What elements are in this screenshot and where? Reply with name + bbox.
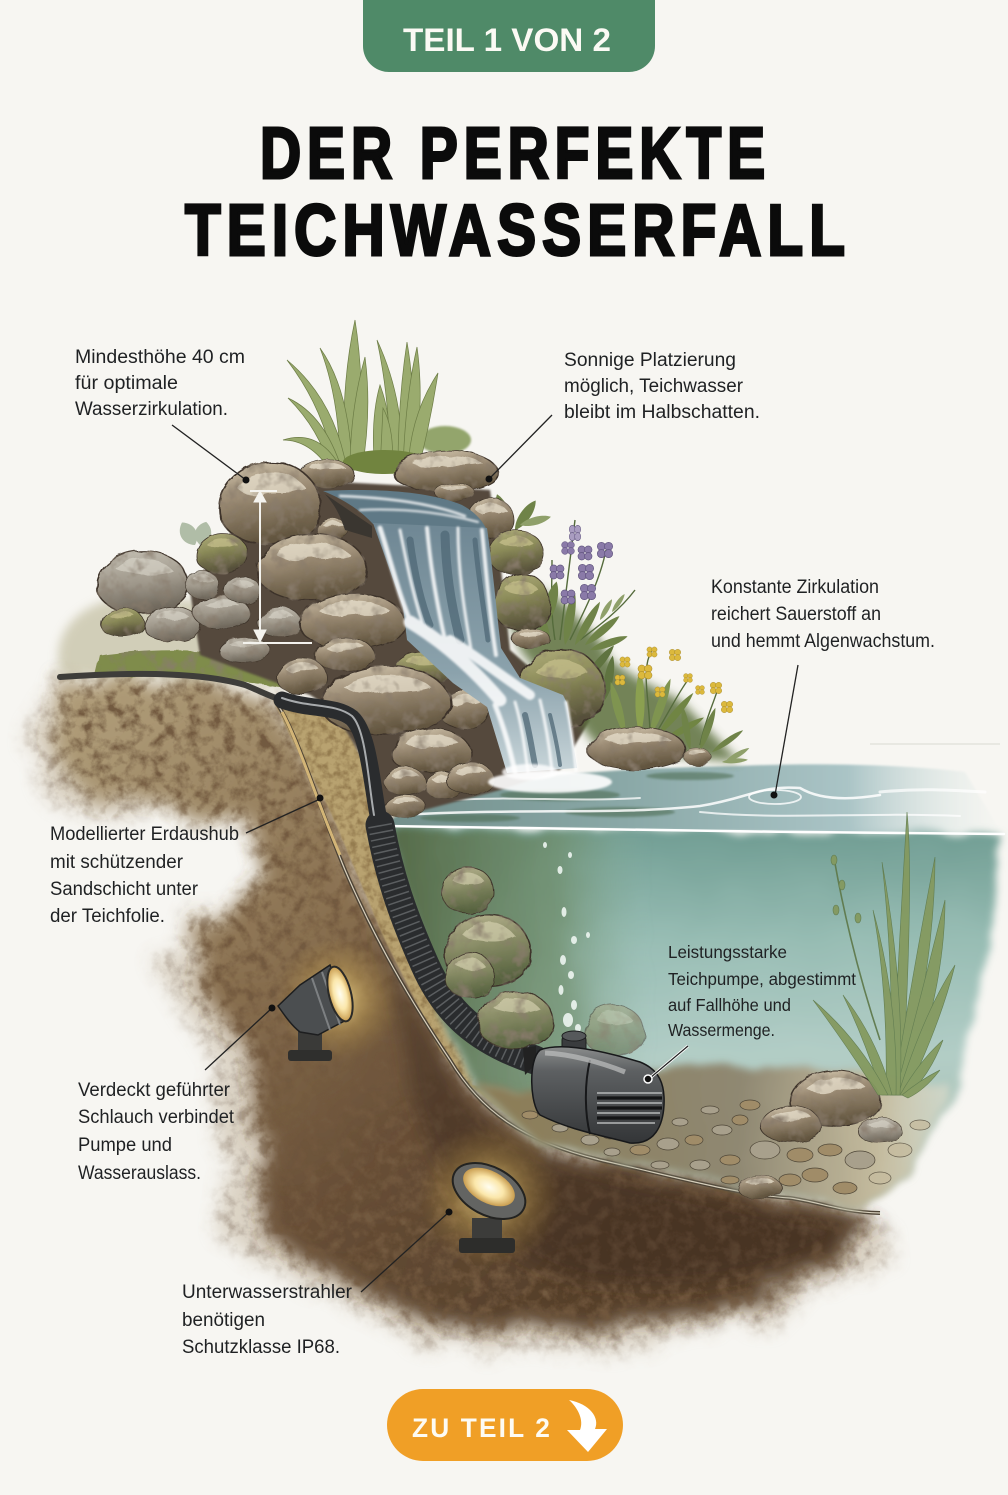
spotlight left: [276, 938, 400, 1062]
dark soil below liner: [365, 915, 860, 1286]
underwater plant: [813, 812, 955, 1098]
purple flowers: [550, 525, 613, 604]
callout: Mindesthöhe: [75, 347, 250, 484]
callout: Mindesthöhe: Wasserzirkulation.: [75, 399, 228, 420]
callout: Zirkulation: reichert Sauerstoff an: [711, 604, 881, 625]
callout: Pumpe: Wassermenge.: [668, 1020, 775, 1040]
callout: Unterwasserstrahler: Schutzklasse IP68.: [182, 1337, 340, 1358]
callout: Mindesthöhe: für optimale: [75, 373, 178, 394]
soil cross-section: [56, 680, 880, 1328]
hill backing: [190, 480, 590, 815]
callout: Schlauch: Schlauch verbindet: [78, 1107, 235, 1128]
badge: Teil 1 von 2: TEIL 1 VON 2: [403, 22, 611, 58]
soil halo: [35, 680, 900, 1350]
callout: Unterwasserstrahler: benötigen: [182, 1310, 265, 1331]
callout: Pumpe: [644, 942, 856, 1083]
underwater rocks: [442, 867, 902, 1199]
callout: Pumpe: Teichpumpe, abgestimmt: [668, 969, 856, 989]
spotlight bottom: [418, 1123, 562, 1267]
pipe outlet: [325, 494, 372, 538]
title: DER PERFEKTE: [260, 114, 771, 194]
callout: Platzierung: [486, 350, 760, 482]
hose: [60, 674, 535, 1060]
callout: Zirkulation: [711, 577, 935, 798]
callout: Platzierung: Sonnige Platzierung: [564, 350, 736, 371]
pond liner line: [278, 705, 880, 1213]
callout: Zirkulation: und hemmt Algenwachstum.: [711, 631, 935, 652]
top grass plants: [283, 320, 471, 474]
callout: Schlauch: [78, 1004, 276, 1184]
callout: Platzierung: möglich, Teichwasser: [564, 376, 744, 397]
icon: curved down arrow: [567, 1400, 607, 1452]
rocks: [97, 450, 712, 818]
right foliage: [492, 492, 751, 764]
gravel bed: [475, 1064, 950, 1210]
callout: Platzierung: bleibt im Halbschatten.: [564, 402, 760, 423]
callout: Schlauch: Pumpe und: [78, 1135, 172, 1156]
yellow flowers: [615, 647, 733, 713]
callout: Mindesthöhe: Mindesthöhe 40 cm: [75, 347, 245, 368]
callout: Erdaushub: Modellierter Erdaushub: [50, 824, 239, 845]
callout: Zirkulation: Konstante Zirkulation: [711, 577, 879, 598]
callout: Schlauch: Verdeckt geführter: [78, 1080, 231, 1101]
bubbles: [543, 842, 590, 1032]
left leaves: [175, 518, 214, 549]
button: zu Teil 2: ZU TEIL 2: [412, 1413, 552, 1443]
badge: Teil 1 von 2: [363, 0, 655, 72]
pale ground and moss: [58, 600, 310, 692]
pump: [523, 1031, 664, 1143]
callout: Erdaushub: mit schützender: [50, 852, 184, 873]
callout: Erdaushub: der Teichfolie.: [50, 906, 165, 927]
waterfall: [323, 490, 612, 793]
water surface: [385, 744, 1004, 834]
water body: [385, 826, 1000, 1208]
callout: Schlauch: Wasserauslass.: [78, 1163, 201, 1184]
callout: Erdaushub: Sandschicht unter: [50, 879, 199, 900]
title: TEICHWASSERFALL: [185, 191, 851, 271]
sand layer: [272, 697, 620, 1150]
illustration: pond cross-section: [35, 320, 1004, 1350]
title: [185, 114, 851, 271]
height measure arrow: [243, 491, 312, 643]
button: zu Teil 2: [387, 1389, 623, 1461]
callout: Unterwasserstrahler: Unterwasserstrahler: [182, 1282, 353, 1303]
callout: Pumpe: auf Fallhöhe und: [668, 995, 791, 1015]
callout: Erdaushub: [50, 794, 324, 927]
callout: Pumpe: Leistungsstarke: [668, 942, 787, 962]
callout: Unterwasserstrahler: [182, 1208, 452, 1358]
